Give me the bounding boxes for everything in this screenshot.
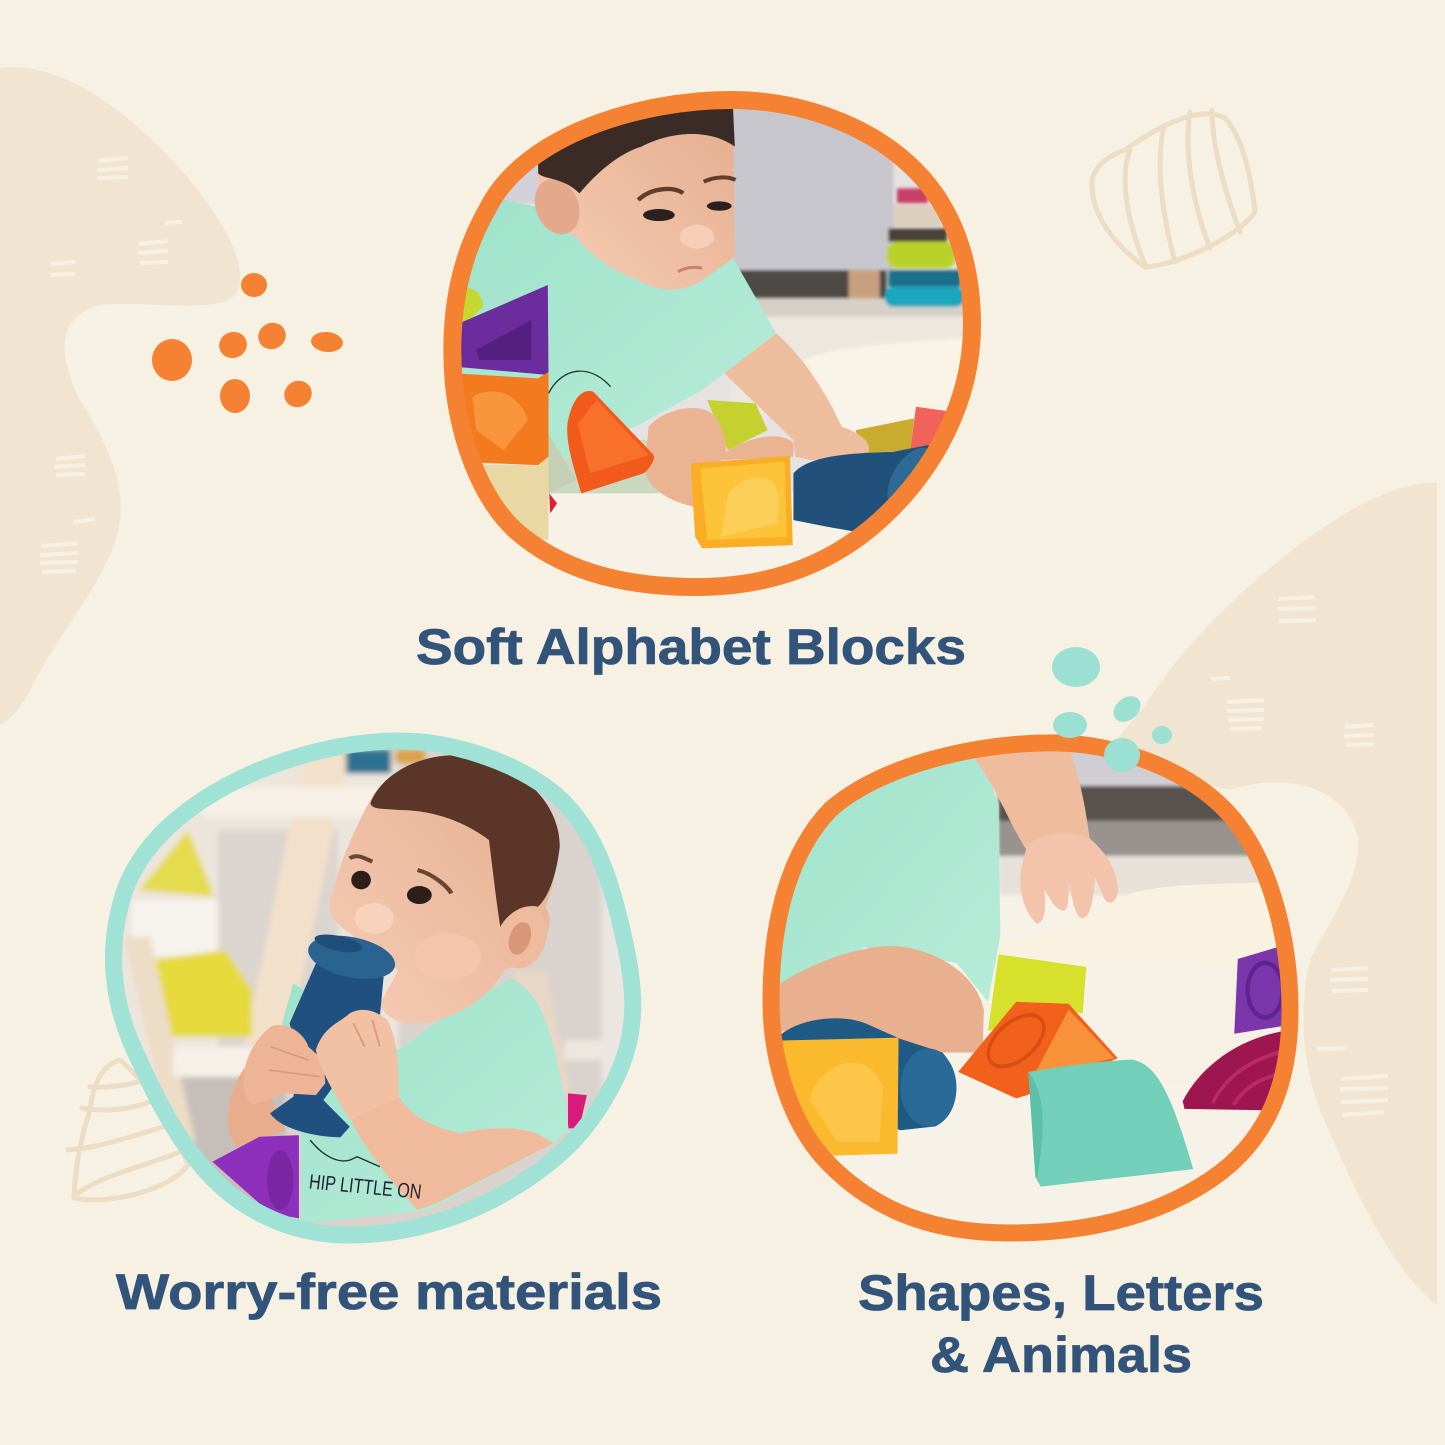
mint block	[1028, 1059, 1193, 1187]
left arm	[228, 1063, 286, 1147]
photo panel: baby with blocks	[445, 90, 997, 607]
leg and foot	[645, 408, 793, 507]
orange dots cluster	[152, 273, 344, 413]
doodle: bottom left stone	[68, 1060, 188, 1200]
orange block	[958, 1002, 1118, 1098]
background blob: left	[0, 67, 240, 725]
hair	[370, 755, 560, 927]
doodle: top right stone	[1092, 110, 1255, 267]
head	[330, 789, 554, 1024]
navy cylinder	[774, 1018, 956, 1130]
blurred room background	[504, 109, 963, 410]
heading: Shapes, Letters & Animals: & Animals	[930, 1327, 1192, 1383]
knit blanket	[1128, 882, 1264, 896]
lower torso fill	[548, 440, 659, 493]
frame ring	[452, 100, 972, 587]
purple block	[1234, 948, 1282, 1034]
photo panel: baby teething: HIP LITTLE ON	[308, 1170, 423, 1204]
arm and hand	[724, 333, 869, 460]
maroon block	[1182, 1032, 1281, 1110]
stacked blocks	[462, 288, 483, 322]
purple block	[212, 1135, 299, 1218]
heading: Shapes, Letters & Animals	[858, 1265, 1264, 1383]
head	[538, 134, 735, 290]
teether bottle	[270, 963, 384, 1137]
heading: Soft Alphabet Blocks: Soft Alphabet Blocks	[416, 619, 966, 675]
ear	[512, 934, 547, 968]
right arm	[350, 1097, 553, 1210]
lime block	[988, 954, 1086, 1031]
small blocks behind	[707, 400, 768, 450]
bodysuit	[780, 758, 1000, 1002]
blurred room background	[996, 752, 1259, 895]
yellow block	[771, 1038, 899, 1158]
blurred shelf background	[98, 750, 632, 1210]
hands	[243, 1025, 325, 1105]
frame ring	[771, 743, 1290, 1233]
background blob: right	[1100, 483, 1437, 1305]
blob texture marks	[40, 158, 1388, 1115]
leg	[771, 946, 984, 1052]
face features	[350, 856, 451, 893]
white blanket	[835, 408, 947, 433]
photo panel: blocks closeup	[762, 734, 1298, 1242]
bodysuit	[455, 197, 776, 463]
navy cylinder	[793, 445, 929, 531]
face features	[638, 189, 683, 200]
heading: Shapes, Letters & Animals: Shapes, Letters	[858, 1265, 1264, 1321]
arm	[976, 751, 1090, 849]
heading: Worry-free materials: Worry-free materials	[116, 1264, 662, 1320]
tilted orange block	[567, 391, 654, 493]
shirt print	[310, 1140, 380, 1167]
yellow block	[691, 456, 793, 548]
teal dots cluster	[1052, 647, 1172, 772]
bodysuit	[282, 978, 569, 1223]
hair	[538, 108, 735, 193]
frame ring	[114, 741, 633, 1235]
hand	[1020, 833, 1118, 924]
photo panel: baby teething	[105, 732, 642, 1244]
